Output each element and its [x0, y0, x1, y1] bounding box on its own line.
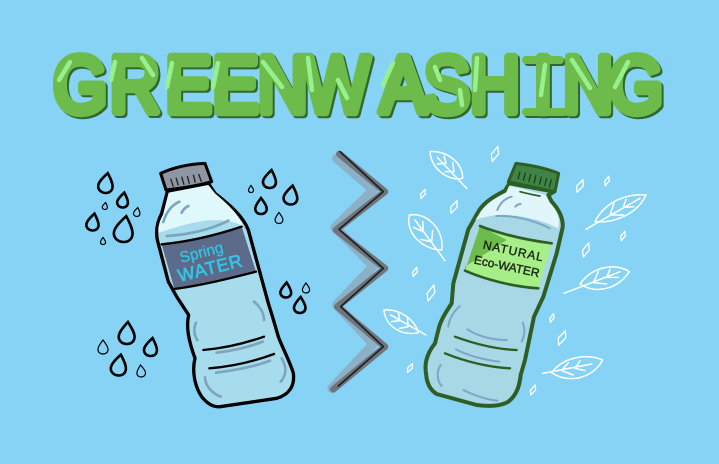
label text: [473, 238, 545, 280]
bottle cap: [161, 163, 212, 190]
bottle body: [426, 183, 563, 406]
bottle body: [157, 183, 294, 407]
label: [465, 226, 552, 288]
label: [162, 227, 256, 289]
title: GREENWASHING: [53, 39, 663, 129]
left water bottle: [157, 163, 294, 407]
leaves left group: [384, 152, 467, 335]
neck line: [520, 192, 540, 196]
title: GREENWASHING: [55, 41, 665, 131]
ridges: [203, 337, 274, 368]
ridges: [445, 337, 517, 368]
leaf 2: [409, 215, 445, 261]
leaf 1: [430, 152, 467, 188]
label text: NATURAL: [482, 238, 545, 264]
label text: Spring: [178, 239, 225, 267]
label text: WATER: [176, 250, 245, 286]
bottle top highlight: [475, 186, 559, 228]
sparkles: [406, 145, 627, 396]
leaf 6: [543, 357, 603, 379]
water reflections: [163, 202, 285, 397]
leaf 5: [564, 267, 629, 293]
right eco bottle: [426, 163, 563, 406]
leaves right group: [543, 195, 646, 379]
water drops: [85, 169, 310, 377]
label text: Eco-WATER: [473, 253, 541, 280]
leaf 4: [586, 195, 646, 229]
zigzag divider: [332, 152, 385, 389]
bottle cap: [508, 163, 559, 192]
leaf 3: [384, 310, 426, 335]
bottle top highlight: [158, 185, 243, 233]
water reflections: [438, 197, 550, 401]
